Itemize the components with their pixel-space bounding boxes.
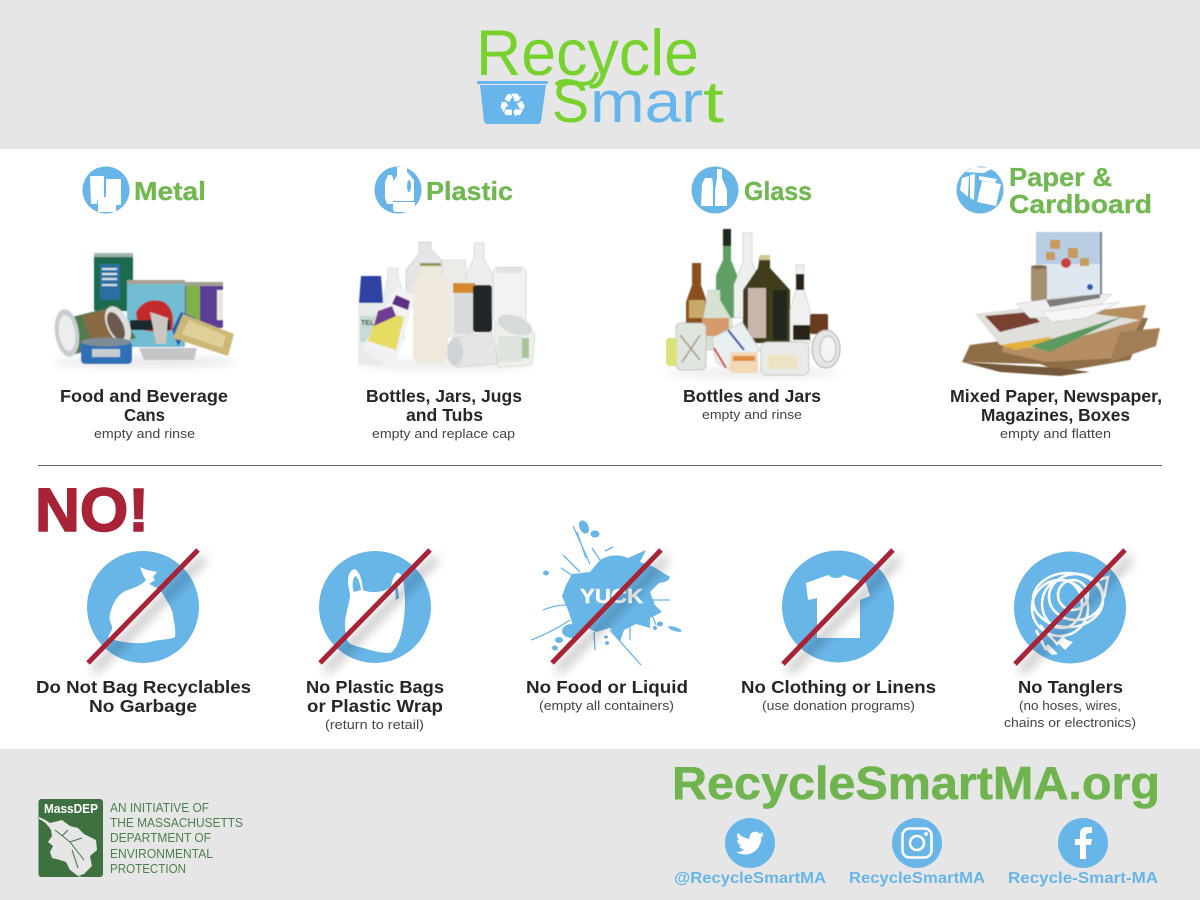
icon: splat crossed out [531, 519, 682, 671]
logo: Recycle Smart [476, 16, 724, 135]
caption: Do Not Bag Recyclables No Garbage: Do Not Bag Recyclables [36, 677, 251, 697]
footer band [0, 749, 1200, 900]
panel: paper and cardboard [950, 162, 1162, 441]
handle: instagram: RecycleSmartMA [849, 870, 985, 887]
caption: No Food or Liquid [526, 677, 688, 713]
caption: No Clothing or Linens: (use donation programs) [762, 698, 915, 713]
logo word: Smart: t [703, 70, 724, 135]
icon: facebook [1058, 818, 1108, 868]
item: no clothing or linens [741, 550, 936, 713]
caption: No Tanglers: No Tanglers [1018, 677, 1123, 697]
header band [0, 0, 1200, 149]
panel: metal [52, 166, 237, 441]
text: initiative statement: AN INITIATIVE OF [110, 801, 209, 815]
caption: Bottles and Jars: Bottles and Jars [683, 386, 821, 406]
caption: Food and Beverage Cans [60, 386, 228, 441]
heading: Paper and Cardboard [1009, 162, 1152, 219]
icon: plastic bag crossed out [319, 550, 436, 671]
text: initiative statement: THE MASSACHUSETTS [110, 816, 243, 830]
caption: Bottles, Jars, Jugs and Tubs: empty and replace cap [372, 426, 515, 441]
icon: recycling bin: ♻ [498, 86, 527, 125]
caption: No Food or Liquid: No Food or Liquid [526, 677, 688, 697]
item: no tanglers [1004, 550, 1136, 730]
logo mark [38, 799, 103, 883]
panel: plastic [358, 166, 535, 441]
logo word: Recycle: Recycle [476, 16, 699, 89]
caption: Bottles, Jars, Jugs and Tubs: and Tubs [406, 405, 483, 425]
handle: twitter: @RecycleSmartMA [674, 870, 826, 887]
caption: No Plastic Bags or Plastic Wrap: (return to retail) [325, 717, 424, 732]
label: YUCK: YUCK [580, 586, 644, 608]
icon: tangled hose crossed out [1014, 550, 1131, 672]
icon: garbage bag crossed out [87, 550, 204, 671]
caption: Food and Beverage Cans: Food and Beverage [60, 386, 228, 406]
caption: Bottles, Jars, Jugs and Tubs [366, 386, 522, 441]
caption: No Plastic Bags or Plastic Wrap: or Plastic Wrap [307, 696, 443, 716]
heading: Plastic: Plastic [426, 176, 513, 206]
caption: Mixed Paper, Newspaper, Magazines, Boxes: Mixed Paper, Newspaper, [950, 386, 1162, 406]
panel: glass [664, 166, 840, 422]
icon: instagram [892, 818, 942, 868]
photo: glass bottles and jars [664, 229, 840, 378]
text: initiative statement: PROTECTION [110, 862, 186, 876]
logo word: Smart: mar [590, 70, 703, 135]
photo: plastic containers: TEL'S [361, 320, 381, 327]
heading: NO!: NO! [35, 476, 149, 544]
caption: Bottles, Jars, Jugs and Tubs: Bottles, Jars, Jugs [366, 386, 522, 406]
photo: paper and cardboard stack [962, 232, 1160, 376]
caption: Do Not Bag Recyclables No Garbage [36, 677, 251, 716]
caption: No Plastic Bags or Plastic Wrap [306, 677, 444, 732]
caption: No Food or Liquid: (empty all containers) [539, 698, 674, 713]
social: instagram [849, 818, 985, 887]
icon: glass [692, 166, 738, 214]
icon: paper and cardboard [956, 166, 1004, 214]
caption: No Tanglers [1004, 677, 1136, 730]
social: facebook [1008, 818, 1158, 887]
item: no bags or garbage [36, 550, 251, 716]
photo: plastic containers [358, 242, 535, 370]
caption: No Clothing or Linens: No Clothing or Linens [741, 677, 936, 697]
caption: Food and Beverage Cans: empty and rinse [94, 426, 195, 441]
caption: Mixed Paper, Newspaper, Magazines, Boxes [950, 386, 1162, 441]
item: no food or liquid [526, 519, 688, 713]
caption: Bottles and Jars: empty and rinse [702, 407, 802, 422]
item: no plastic bags [306, 550, 444, 732]
caption: Mixed Paper, Newspaper, Magazines, Boxes: empty and flatten [1000, 426, 1111, 441]
heading: Paper and Cardboard: Paper & [1009, 162, 1112, 192]
photo: metal cans [52, 253, 237, 368]
icon: metal [82, 166, 130, 214]
logo word: Smart: S [552, 70, 589, 135]
caption: No Clothing or Linens [741, 677, 936, 713]
caption: No Tanglers: chains or electronics) [1004, 715, 1136, 730]
heading: Paper and Cardboard: Cardboard [1009, 189, 1152, 219]
heading: Glass: Glass [744, 176, 812, 206]
logo word: Smart [552, 70, 724, 135]
logo: MassDEP [38, 799, 243, 883]
caption: No Tanglers: (no hoses, wires, [1019, 698, 1121, 713]
heading: Metal: Metal [134, 176, 206, 206]
caption: Do Not Bag Recyclables No Garbage: No Garbage [89, 696, 197, 716]
caption: Food and Beverage Cans: Cans [124, 405, 165, 425]
text: initiative statement: DEPARTMENT OF [110, 831, 211, 845]
icon: recycling bin [477, 81, 548, 125]
caption: Mixed Paper, Newspaper, Magazines, Boxes: Magazines, Boxes [981, 405, 1130, 425]
social: twitter [674, 818, 826, 887]
website url: RecycleSmartMA.org [672, 757, 1160, 809]
icon: t-shirt crossed out [782, 550, 899, 672]
caption: Bottles and Jars [683, 386, 821, 422]
logo mark: MassDEP [44, 802, 98, 816]
caption: No Plastic Bags or Plastic Wrap: No Plastic Bags [306, 677, 444, 697]
handle: facebook: Recycle-Smart-MA [1008, 870, 1158, 887]
text: initiative statement [110, 801, 243, 876]
icon: twitter [725, 818, 775, 868]
icon: plastic [374, 166, 422, 214]
text: initiative statement: ENVIRONMENTAL [110, 847, 213, 861]
logo swoosh [556, 72, 597, 85]
